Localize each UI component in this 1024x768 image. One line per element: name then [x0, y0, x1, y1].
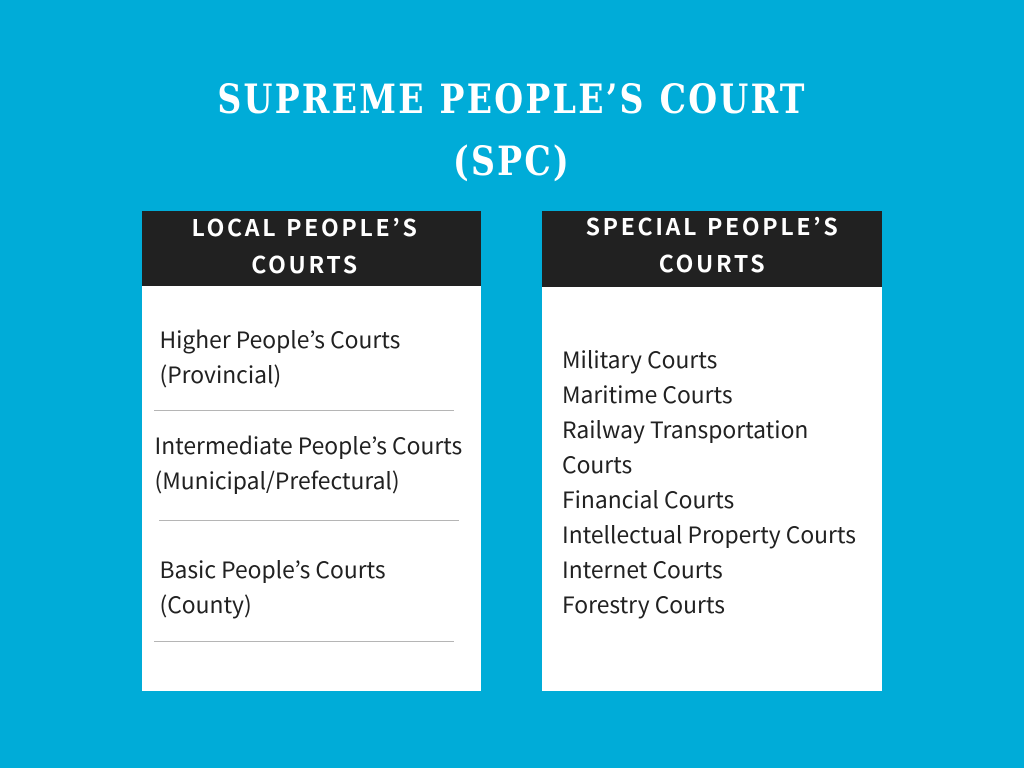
list of special courts: Forestry Courts	[562, 586, 725, 620]
heading: local people's courts	[142, 211, 481, 286]
list of special courts: Financial Courts	[562, 481, 734, 515]
heading: special people's courts	[542, 211, 882, 287]
text: higher courts	[160, 321, 400, 390]
list of special courts	[562, 341, 856, 620]
text: basic courts: (County)	[160, 586, 252, 620]
panel: special people's courts	[542, 211, 882, 691]
list of special courts: Maritime Courts	[562, 376, 733, 410]
heading text	[586, 208, 840, 279]
title: (SPC)	[453, 138, 571, 185]
title: SUPREME PEOPLE’S COURT	[217, 76, 807, 123]
text: intermediate courts: Intermediate People’s Courts	[154, 427, 462, 461]
panel: local people's courts	[142, 211, 481, 691]
text: basic courts: Basic People’s Courts	[160, 551, 386, 585]
text: higher courts: Higher People’s Courts	[160, 321, 400, 355]
heading text: LOCAL PEOPLE’S	[191, 209, 420, 243]
heading text: COURTS	[659, 245, 767, 279]
text: intermediate courts	[154, 427, 462, 496]
heading text	[191, 209, 420, 280]
list of special courts: Railway Transportation	[562, 411, 808, 445]
text: basic courts	[160, 551, 386, 620]
text: higher courts: (Provincial)	[160, 356, 281, 390]
list of special courts: Internet Courts	[562, 551, 723, 585]
heading text: SPECIAL PEOPLE’S	[586, 208, 840, 242]
heading text: COURTS	[251, 246, 360, 280]
title	[217, 76, 807, 185]
list of special courts: Military Courts	[562, 341, 717, 375]
list of special courts: Courts	[562, 446, 632, 480]
text: intermediate courts: (Municipal/Prefectural)	[154, 462, 400, 496]
list of special courts: Intellectual Property Courts	[562, 516, 856, 550]
